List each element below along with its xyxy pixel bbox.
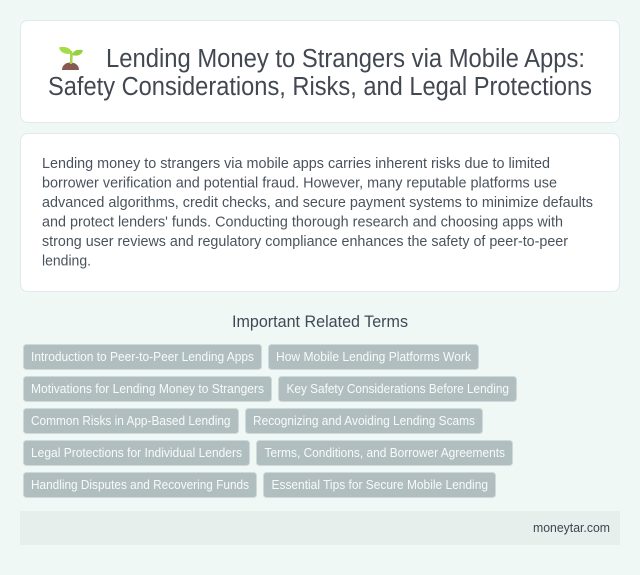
tag: essential tips: Essential Tips for Secure Mobile Lending bbox=[272, 478, 488, 492]
title text: Safety Considerations, Risks, and Legal Protections bbox=[48, 73, 592, 101]
summary paragraph bbox=[42, 155, 593, 270]
tag: essential tips bbox=[264, 472, 496, 498]
tag: scams: Recognizing and Avoiding Lending Scams bbox=[253, 414, 475, 428]
heading: important related terms: Important Related Terms bbox=[232, 313, 408, 331]
tag: scams bbox=[246, 408, 482, 434]
summary paragraph: advanced algorithms, credit checks, and secure payment systems to minimize defaults bbox=[42, 194, 593, 211]
summary paragraph: Lending money to strangers via mobile apps carries inherent risks due to limited bbox=[42, 155, 550, 172]
title text: Lending Money to Strangers via Mobile Apps: bbox=[106, 45, 585, 73]
icon: sprout bbox=[59, 47, 83, 70]
tag: legal protections bbox=[24, 440, 250, 466]
panel: title card bbox=[20, 20, 620, 122]
tag: key safety bbox=[278, 376, 516, 402]
tag: common risks bbox=[24, 408, 238, 434]
tag: how platforms work: How Mobile Lending Platforms Work bbox=[276, 350, 472, 364]
tag: key safety: Key Safety Considerations Before Lending bbox=[286, 382, 509, 396]
summary paragraph: lending. bbox=[42, 252, 91, 270]
title text bbox=[48, 45, 592, 101]
tag: common risks: Common Risks in App-Based Lending bbox=[31, 414, 231, 428]
tag: terms and conditions bbox=[256, 440, 512, 466]
tag: introduction: Introduction to Peer-to-Peer Lending Apps bbox=[31, 350, 254, 364]
tag: legal protections: Legal Protections for Individual Lenders bbox=[31, 446, 242, 460]
panel: related term tags bbox=[24, 344, 516, 498]
tag: disputes: Handling Disputes and Recovering Funds bbox=[31, 478, 249, 492]
tag: disputes bbox=[24, 472, 256, 498]
panel: summary card bbox=[20, 134, 620, 292]
footer bar bbox=[20, 511, 620, 545]
footer source: moneytar.com bbox=[533, 520, 610, 535]
tag: motivations bbox=[24, 376, 272, 402]
summary paragraph: borrower verification and potential fraud. However, many reputable platforms use bbox=[42, 174, 557, 192]
summary paragraph: strong user reviews and regulatory compliance enhances the safety of peer-to-peer bbox=[42, 233, 568, 250]
tag: introduction bbox=[24, 344, 262, 370]
summary paragraph: and protect lenders' funds. Conducting thorough research and choosing apps with bbox=[42, 214, 563, 230]
tag: motivations: Motivations for Lending Money to Strangers bbox=[31, 382, 264, 396]
tag: how platforms work bbox=[268, 344, 478, 370]
tag: terms and conditions: Terms, Conditions, and Borrower Agreements bbox=[264, 446, 505, 460]
